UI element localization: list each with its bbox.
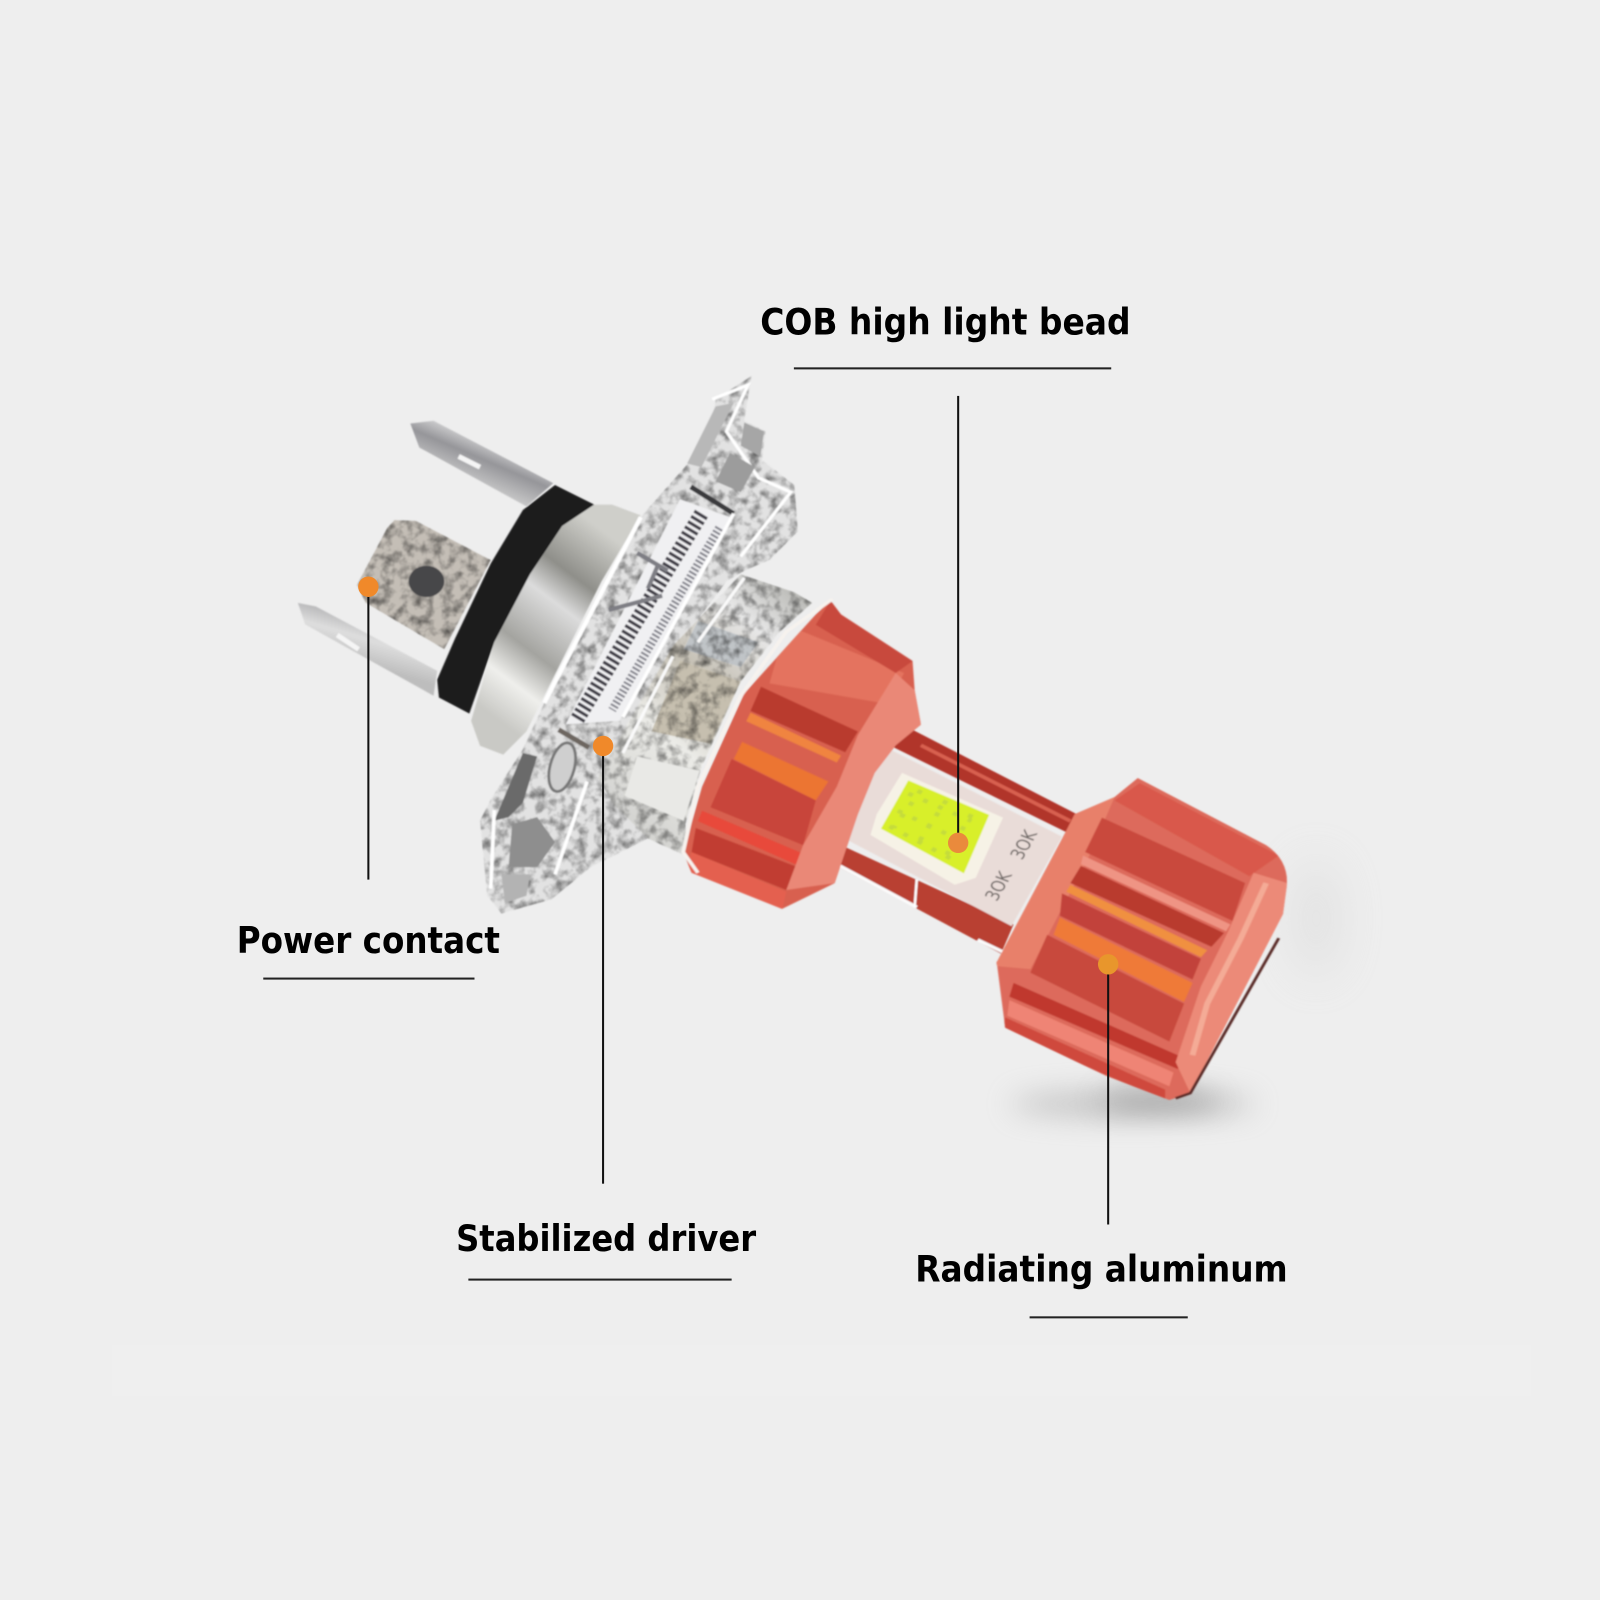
upper tube bbox=[889, 730, 1077, 833]
underline bbox=[1030, 1316, 1188, 1318]
marker bbox=[1098, 954, 1118, 974]
label: Radiating aluminum bbox=[915, 1248, 1288, 1291]
label: COB high light bead bbox=[760, 301, 1131, 344]
leader line bbox=[1107, 964, 1109, 1224]
callout: COB high light bead bbox=[760, 301, 1131, 853]
red aluminum front section bbox=[681, 601, 1288, 1101]
marker bbox=[948, 833, 968, 853]
front rim highlight bbox=[683, 599, 833, 873]
leader line bbox=[957, 396, 959, 843]
faint ghost text band bbox=[112, 1345, 1531, 1396]
leader line bbox=[367, 587, 369, 880]
silver collar bbox=[598, 574, 812, 856]
black rubber ring bbox=[437, 485, 594, 714]
leader line bbox=[602, 746, 604, 1184]
COB LED chip bbox=[870, 773, 1003, 885]
label: Stabilized driver bbox=[456, 1217, 756, 1260]
infographic canvas bbox=[240, 306, 1321, 1318]
label: Power contact bbox=[237, 919, 500, 962]
silver rear section bbox=[298, 376, 812, 914]
board markings 2: 3OK bbox=[981, 868, 1018, 904]
underline bbox=[794, 367, 1111, 369]
callout: Radiating aluminum bbox=[915, 954, 1288, 1318]
marker bbox=[593, 736, 613, 756]
underline bbox=[263, 978, 474, 980]
circuit board bbox=[841, 747, 1062, 926]
lower tube bbox=[837, 845, 1014, 954]
rear head dark edge bbox=[1176, 938, 1279, 1098]
upper pin bbox=[410, 421, 553, 506]
center power tab bbox=[357, 520, 491, 649]
lower pin bbox=[298, 603, 437, 696]
marker bbox=[358, 577, 379, 597]
floor shadow bbox=[1010, 857, 1339, 1116]
callout: Stabilized driver bbox=[456, 736, 756, 1281]
bulb photo illustration bbox=[298, 376, 1300, 1110]
underline bbox=[468, 1279, 732, 1281]
silver cup bbox=[471, 505, 641, 755]
flange plate bbox=[480, 376, 798, 914]
board markings: 3OK bbox=[1007, 827, 1043, 863]
front heat sink head bbox=[684, 601, 922, 910]
callout: Power contact bbox=[237, 577, 500, 980]
rear heat sink head bbox=[988, 773, 1300, 1110]
